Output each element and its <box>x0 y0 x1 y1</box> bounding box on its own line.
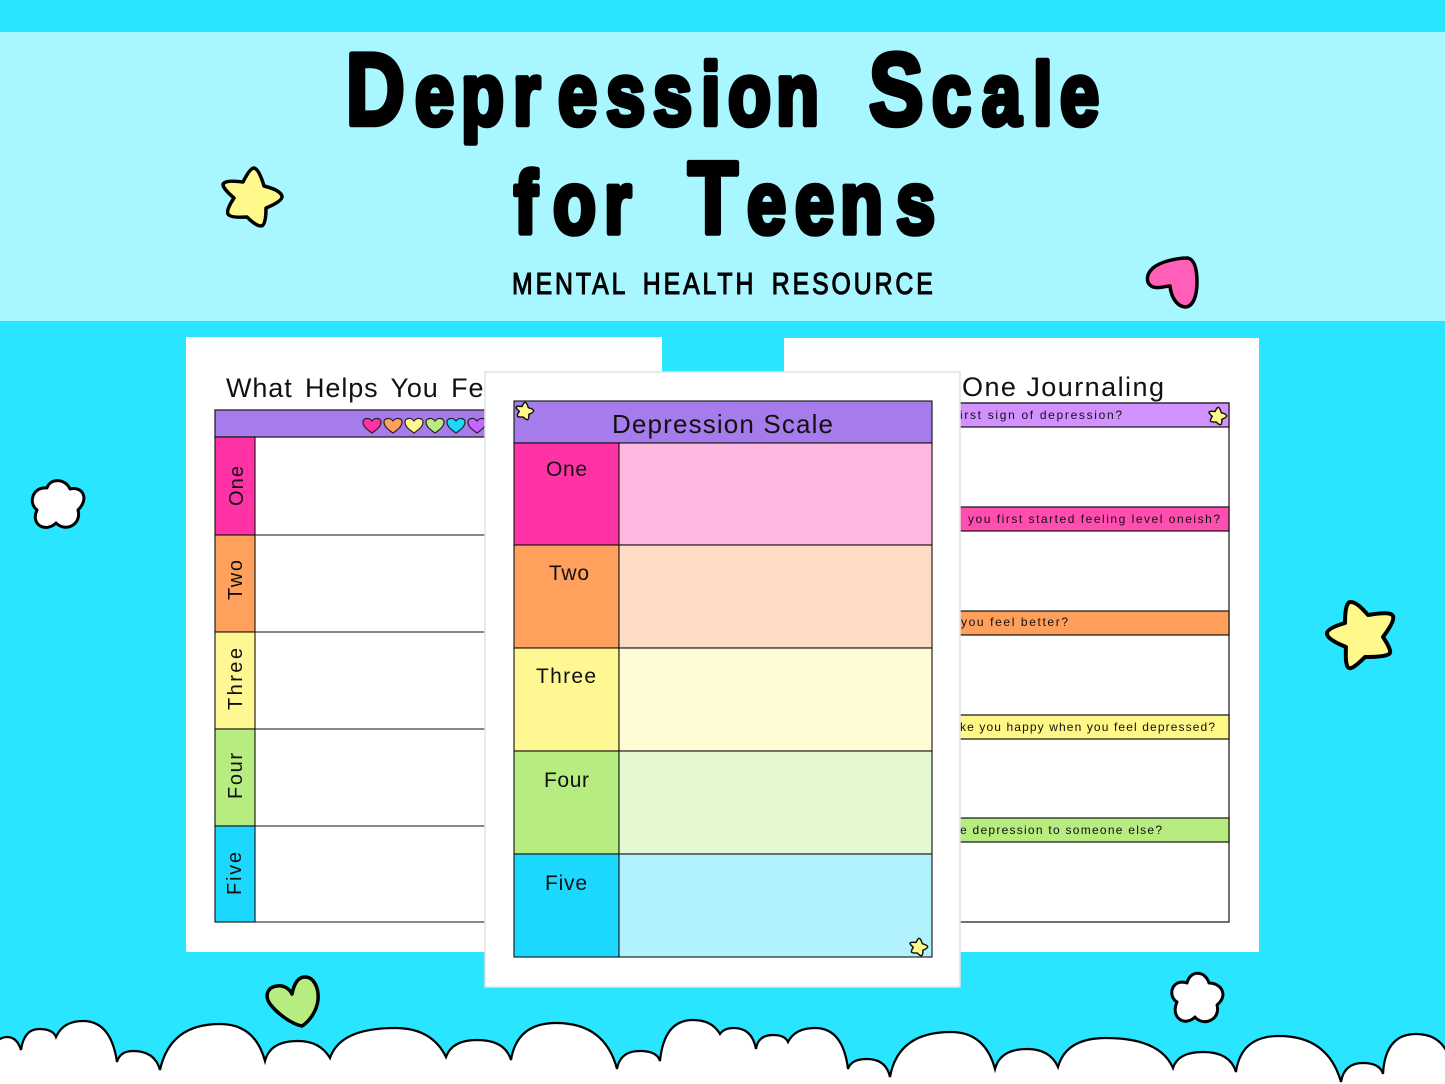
scale labels: One <box>546 458 587 481</box>
title: cale <box>932 45 1099 143</box>
scale labels: Three <box>536 665 596 688</box>
rotated level labels <box>224 466 248 895</box>
title: eens <box>747 153 935 252</box>
rotated level labels: Three <box>225 648 247 710</box>
header bar <box>514 401 932 443</box>
rotated level labels: Two <box>225 560 247 600</box>
icon: white cloud bottom right <box>1172 973 1223 1022</box>
journaling table <box>940 403 1229 922</box>
worksheet title: One Journaling <box>962 372 1164 402</box>
title: epression <box>415 45 819 143</box>
icon: green heart <box>267 977 318 1026</box>
rotated level labels: Five <box>224 852 246 895</box>
journaling questions: you first started feeling level oneish? <box>968 512 1220 526</box>
panel: centre worksheet <box>485 372 960 987</box>
icon: white cloud left <box>32 481 84 527</box>
icon: small star bottom <box>910 938 928 956</box>
scale labels: Five <box>545 872 587 895</box>
title: for <box>514 153 631 252</box>
title <box>346 32 1099 255</box>
icon: yellow star right <box>1327 602 1393 668</box>
icon: pink heart <box>1147 258 1197 307</box>
title: S <box>869 32 923 147</box>
worksheet title: What Helps You Feel <box>226 373 507 403</box>
subtitle: MENTAL HEALTH RESOURCE <box>512 266 933 301</box>
scale labels <box>536 458 596 895</box>
header banner <box>0 32 1445 321</box>
scale labels: Four <box>544 769 589 792</box>
icon: small star <box>1209 407 1227 425</box>
journaling questions: ke you happy when you feel depressed? <box>960 720 1215 734</box>
panel: left worksheet <box>186 337 662 952</box>
rotated level labels: One <box>226 466 248 506</box>
title: D <box>346 32 405 147</box>
journaling questions: irst sign of depression? <box>960 408 1122 422</box>
scale labels: Two <box>549 562 589 585</box>
heart row <box>363 418 486 433</box>
panel: right worksheet <box>784 338 1259 952</box>
header bar <box>215 410 505 437</box>
journaling questions: e depression to someone else? <box>960 823 1162 837</box>
scale rows <box>514 443 932 957</box>
journaling questions: you feel better? <box>961 615 1068 629</box>
icon: yellow star top left <box>223 168 282 226</box>
worksheet heading: Depression Scale <box>612 409 833 439</box>
row labels and rows <box>215 437 500 922</box>
rotated level labels: Four <box>225 753 247 799</box>
title: T <box>688 140 738 255</box>
icon: small star top <box>516 402 534 420</box>
journaling questions <box>960 408 1220 837</box>
cloud border along bottom <box>0 1020 1445 1084</box>
